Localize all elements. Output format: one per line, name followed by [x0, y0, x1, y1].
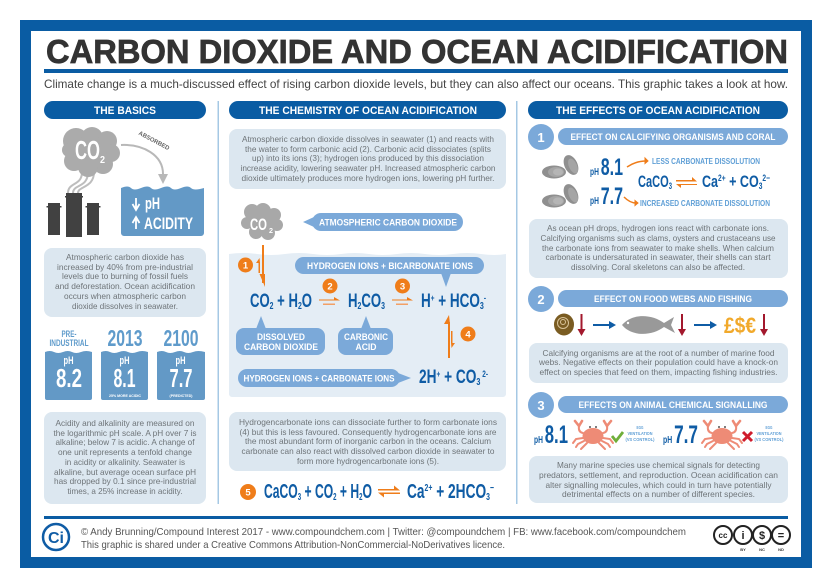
text block: chemical signalling: Many marine species use chemical signals for detecting	[557, 461, 760, 470]
label: egg ventilation: (VS CONTROL)	[754, 437, 784, 442]
licence icons: $	[759, 530, 765, 542]
equation: reaction 5: + H	[337, 481, 359, 503]
equation: products: 2−	[762, 173, 770, 183]
pH 8.1: pH 8.1	[534, 421, 568, 449]
callout: carbonic acid: CARBONIC	[344, 332, 388, 342]
icon: shells bottom	[542, 182, 581, 208]
arrow: step 3	[392, 297, 413, 305]
column divider	[218, 101, 219, 504]
text block: chemistry intro: increase acidity, lowering seawater pH. Increased atmospheric carbon	[240, 164, 496, 173]
equation: H2CO3: H	[348, 291, 362, 312]
equation: calcium carbonate: 3	[669, 181, 672, 191]
heading: the effects: THE EFFECTS OF OCEAN ACIDIFICATION	[556, 105, 760, 117]
pH card: 2100	[157, 325, 205, 400]
text block: food webs	[529, 343, 788, 383]
pH 8.1: pH 8.1	[590, 154, 623, 181]
pH card: 2013	[101, 325, 148, 400]
heading: the basics	[44, 101, 206, 119]
text block: acidity and alkalinity: the logarithmic pH scale. A pH over 7 is	[54, 429, 196, 438]
icon: red down arrow	[678, 314, 686, 336]
badge: 4	[460, 326, 476, 342]
text block: calcifying organisms: carbonate is undersaturated in seawater, their shells can start	[546, 253, 771, 262]
arrow: absorbed	[121, 131, 171, 184]
text block: hydrogencarbonate: form more hydrogencarbonate ions (5).	[297, 457, 439, 466]
pH card: 2100: pH	[176, 355, 186, 367]
icon: CO2 cloud: 2	[100, 155, 105, 166]
licence icons: NC	[759, 547, 765, 552]
equation: calcium carbonate: CaCO	[638, 172, 685, 191]
equation: CO2 + H2O: O	[302, 291, 312, 312]
equation: reaction 5: + CO	[301, 481, 333, 503]
section heading 2: 2	[537, 292, 545, 307]
text block: food webs: webs. Negative effects on their population could have a knock-on	[538, 358, 778, 367]
label: egg ventilation: VENTILATION	[628, 431, 652, 436]
equation: 2H+ + CO3 2-: +	[437, 369, 440, 379]
equation: H+ + HCO3-: H	[421, 291, 435, 312]
icon: sea snail	[554, 314, 574, 336]
section heading 1	[528, 124, 788, 150]
label: increased dissolution: INCREASED CARBONATE DISSOLUTION	[640, 199, 770, 208]
subtitle: Climate change is a much-discussed effect of rising carbon dioxide levels, but they can also affect our oceans. This graphic takes a look at how.	[44, 77, 788, 91]
icon: acidified water	[121, 186, 204, 236]
column divider	[516, 101, 518, 504]
text block: acidity and alkalinity	[44, 412, 206, 504]
badge: 3: 3	[400, 282, 405, 292]
pH card: pre-industrial	[45, 329, 92, 400]
arrow: step 2	[319, 297, 340, 305]
text block: food webs: Calcifying organisms are at the root of a number of marine food	[542, 349, 775, 358]
equation: H+ + HCO3-: 3	[480, 301, 484, 312]
text block: atmospheric carbon dioxide: dioxide dissolves in seawater.	[72, 302, 178, 311]
text block: hydrogencarbonate	[229, 412, 506, 471]
label: less dissolution: LESS CARBONATE DISSOLUTION	[652, 157, 760, 166]
text block: acidity and alkalinity: Acidity and alkalinity are measured on	[56, 419, 195, 428]
section heading 3	[528, 392, 788, 418]
heading: the basics: THE BASICS	[94, 105, 156, 117]
text block: hydrogencarbonate: carbonate can also react with dissolved carbon dioxide in seawater to	[242, 447, 495, 456]
footer credit: This graphic is shared under a Creative Commons Attribution-NonCommercial-NoDerivatives licence.	[81, 539, 505, 551]
logo: compound interest: Ci	[48, 530, 64, 547]
equation: reaction 5: O	[363, 481, 372, 503]
pH card: pre-industrial: 8.2	[56, 363, 82, 393]
section heading 2	[528, 286, 788, 312]
icon: smoke	[68, 172, 94, 193]
badge: 5	[240, 484, 256, 500]
arrow: reaction 5 equilibrium	[378, 486, 400, 498]
equation: reaction 5: 2	[333, 492, 337, 503]
icon: fish	[622, 316, 675, 334]
equation: H2CO3: CO	[361, 291, 381, 312]
text block: chemistry intro: up) into its ions (3); hydrogen ions produced by this dissociation	[252, 154, 484, 163]
icon: atmospheric CO2 cloud: 2	[269, 228, 273, 235]
callout: carbonic acid	[338, 316, 393, 355]
section heading 3: 3	[537, 398, 545, 413]
text block: atmospheric carbon dioxide: increased by 40% from pre-industrial	[57, 263, 193, 272]
text block: calcifying organisms: dissolving. Coral skeletons can also be affected.	[571, 263, 745, 272]
pH card: 2100: 7.7	[170, 363, 192, 393]
text block: acidity and alkalinity: alkaline; below 7 is acidic. A change of	[56, 438, 195, 447]
text block: acidity and alkalinity: has dropped by 0.1 since pre-industrial	[54, 477, 196, 486]
text block: food webs: effect on species that feed on them, impacting fishing industries.	[540, 368, 778, 377]
callout: atmospheric carbon dioxide: ATMOSPHERIC CARBON DIOXIDE	[319, 218, 457, 228]
icon: CO2 cloud	[62, 127, 120, 177]
callout: dissolved carbon dioxide: CARBON DIOXIDE	[244, 342, 318, 352]
panel: the chemistry	[229, 101, 506, 503]
equation: 2H+ + CO3 2-: 3	[476, 377, 481, 388]
equation: reaction 5 products: 2+	[425, 483, 432, 494]
footer rule	[44, 516, 788, 519]
pH card: pre-industrial: INDUSTRIAL	[50, 338, 89, 348]
pH card: pre-industrial: PRE-	[62, 329, 76, 339]
pH card: pre-industrial: pH	[64, 355, 74, 367]
equation: H+ + HCO3-: +	[431, 293, 435, 303]
licence icons: ND	[778, 547, 784, 552]
equation: H2CO3: 2	[358, 301, 362, 312]
heading: the chemistry: THE CHEMISTRY OF OCEAN ACIDIFICATION	[259, 105, 477, 117]
equation: reaction 5: 2	[359, 492, 363, 503]
pH card: 2100: (PREDICTED)	[170, 393, 193, 398]
icon: atmospheric CO2 cloud: CO	[250, 215, 267, 234]
licence icons: cc	[719, 531, 728, 540]
icon: tick	[612, 432, 623, 441]
icon: red down arrow	[578, 314, 586, 336]
icon: currency: £$€	[724, 313, 756, 338]
text block: hydrogencarbonate: the most abundant form of inorganic carbon in the oceans. Calcium	[245, 437, 491, 446]
text block: acidity and alkalinity: alkaline, but average ocean surface pH	[54, 468, 196, 477]
text block: chemistry intro: the water to form carbonic acid (2). Carbonic acid dissociates (splits	[245, 145, 491, 154]
text block: chemistry intro: Atmospheric carbon dioxide dissolves in seawater (1) and reacts with	[242, 135, 494, 144]
equation: products: + CO	[726, 172, 759, 191]
callout: carbonic acid: ACID	[356, 342, 377, 352]
pH card: 2100: 2100	[164, 325, 198, 351]
icon: atmospheric CO2 cloud	[241, 203, 283, 240]
icon: smokestacks	[46, 193, 100, 237]
text block: chemical signalling: alter signalling molecules, which could in turn have potentially	[546, 481, 772, 490]
section heading 3: EFFECTS ON ANIMAL CHEMICAL SIGNALLING	[578, 400, 768, 410]
text block: atmospheric carbon dioxide: levels due to burning of fossil fuels	[62, 272, 188, 281]
label: egg ventilation: EGG	[636, 425, 644, 430]
badge: 2	[322, 278, 338, 294]
text block: atmospheric carbon dioxide	[44, 248, 206, 317]
equation: CO2 + H2O: CO	[250, 291, 278, 312]
icon: crab	[573, 421, 613, 449]
section heading 2: EFFECT ON FOOD WEBS AND FISHING	[594, 294, 752, 304]
licence icons: BY	[740, 547, 746, 552]
label: egg ventilation	[626, 425, 655, 442]
callout: hydrogen + carbonate	[238, 369, 411, 387]
equation: CO2 + H2O: 2	[298, 301, 302, 312]
logo: compound interest	[43, 524, 69, 550]
pH card: 2013: pH	[120, 355, 130, 367]
licence icons	[714, 526, 790, 552]
text block: hydrogencarbonate: (4) but this is less favoured. Consequently hydrogencarbonate ions are	[240, 428, 497, 437]
callout: hydrogen + carbonate: HYDROGEN IONS + CARBONATE IONS	[244, 374, 394, 384]
badge: 1	[238, 258, 253, 272]
text block: atmospheric carbon dioxide: Atmospheric carbon dioxide has	[66, 253, 184, 262]
pH card: 2013: 25% MORE ACIDIC	[109, 393, 141, 398]
text block: calcifying organisms	[529, 219, 788, 278]
arrow: absorbed: ABSORBED	[137, 131, 171, 152]
callout: dissolved carbon dioxide	[236, 316, 325, 355]
text block: chemical signalling	[529, 456, 788, 503]
equation: 2H+ + CO3 2-: + CO	[440, 367, 476, 388]
badge: 4: 4	[465, 330, 471, 340]
badge: 2: 2	[327, 282, 333, 292]
footer credit	[81, 526, 686, 551]
text block: acidity and alkalinity: times, a 25% increase in acidity.	[68, 487, 182, 496]
label: egg ventilation	[754, 425, 784, 442]
text block: calcifying organisms: As ocean pH drops, hydrogen ions react with carbonate ions.	[547, 224, 769, 233]
text block: acidity and alkalinity: in acidity or alkalinity. Seawater is	[65, 458, 185, 467]
equation: H2CO3: 3	[381, 301, 385, 312]
icon: shells top	[542, 153, 581, 178]
text block: chemical signalling: predators, settlement, and reproduction. Ocean acidification can	[539, 471, 778, 480]
arrow: increased dissolution	[624, 197, 638, 206]
equation: products: Ca	[702, 172, 724, 191]
arrow: blue	[694, 321, 717, 329]
arrow: step 1	[256, 245, 265, 287]
title rule	[44, 69, 788, 73]
icon: CO2 cloud: CO	[75, 135, 100, 165]
label: egg ventilation: VENTILATION	[756, 431, 782, 436]
section heading 1: EFFECT ON CALCIFYING ORGANISMS AND CORAL	[570, 132, 776, 142]
callout: atmospheric carbon dioxide	[303, 213, 463, 231]
pH 7.7: pH 7.7	[663, 421, 698, 449]
equation: 2H+ + CO3 2-: 2H	[419, 367, 443, 388]
arrow: less dissolution	[627, 158, 648, 167]
text block: chemistry intro: dioxide ultimately produces more hydrogen ions, lowering pH further.	[242, 174, 494, 183]
text block: calcifying organisms: Calcifying organisms such as clams, oysters and crustaceans use	[540, 234, 776, 243]
equation: reaction 5 products: 3	[486, 492, 490, 503]
text block: chemistry intro	[229, 129, 506, 189]
callout: hydrogen + bicarbonate: HYDROGEN IONS + BICARBONATE IONS	[307, 261, 473, 271]
equation: reaction 5 products: Ca	[407, 481, 433, 503]
licence icons: =	[778, 530, 784, 542]
callout: hydrogen + bicarbonate	[295, 257, 484, 287]
heading: the effects	[528, 101, 788, 119]
equation: products: 3	[759, 181, 762, 191]
arrow: blue	[593, 321, 616, 329]
badge: 3	[395, 278, 410, 294]
equation: CO2 + H2O: + H	[274, 291, 298, 312]
text block: atmospheric carbon dioxide: and deforestation. Ocean acidification	[55, 282, 195, 291]
pH card: 2013: 8.1	[114, 363, 136, 393]
equation: products: 2+	[718, 173, 726, 183]
text block: calcifying organisms: the carbonate ions from seawater to make shells. When calcium	[542, 244, 774, 253]
icon: red down arrow	[760, 314, 768, 336]
section heading 1: 1	[537, 130, 545, 145]
arrow: equilibrium	[676, 177, 697, 188]
equation: H+ + HCO3-: + HCO	[435, 291, 480, 312]
equation: 2H+ + CO3 2-: 2-	[480, 369, 488, 379]
badge: 1: 1	[243, 260, 249, 272]
callout: dissolved carbon dioxide: DISSOLVED	[257, 332, 305, 342]
licence icons: i	[741, 530, 745, 542]
equation: H+ + HCO3-: -	[484, 293, 486, 303]
panel: the effects	[528, 101, 788, 503]
label: egg ventilation: (VS CONTROL)	[626, 437, 655, 442]
icon: cross	[743, 432, 752, 441]
seawater background	[229, 253, 506, 397]
panel: the basics	[44, 101, 206, 504]
heading: the chemistry	[229, 101, 506, 119]
text block: hydrogencarbonate: Hydrogencarbonate ions can dissociate further to form carbonate ions	[239, 418, 497, 427]
arrow: step 4	[444, 315, 455, 358]
equation: CO2 + H2O: 2	[270, 301, 274, 312]
equation: reaction 5 products: + 2HCO	[432, 481, 486, 503]
text block: atmospheric carbon dioxide: occurs when atmospheric carbon	[64, 292, 186, 301]
icon: crab	[702, 421, 742, 449]
icon: acidified water: pH	[145, 194, 160, 213]
text block: chemical signalling: detrimental effects on a number of different species.	[562, 490, 755, 499]
footer credit: © Andy Brunning/Compound Interest 2017 - www.compoundchem.com | Twitter: @compoundchem | FB: www.facebook.com/compoundchem	[81, 526, 686, 538]
badge: 5: 5	[245, 488, 251, 498]
pH card: 2013: 2013	[108, 325, 142, 351]
equation: reaction 5: 3	[298, 492, 301, 503]
equation: reaction 5 products: −	[490, 483, 494, 494]
equation: reaction 5: CaCO	[264, 481, 320, 503]
pH 7.7: pH 7.7	[590, 183, 623, 210]
icon: acidified water: ACIDITY	[144, 214, 193, 233]
title: CARBON DIOXIDE AND OCEAN ACIDIFICATION	[46, 33, 788, 70]
text block: acidity and alkalinity: one unit represents a tenfold change	[58, 448, 192, 457]
label: egg ventilation: EGG	[766, 425, 773, 430]
